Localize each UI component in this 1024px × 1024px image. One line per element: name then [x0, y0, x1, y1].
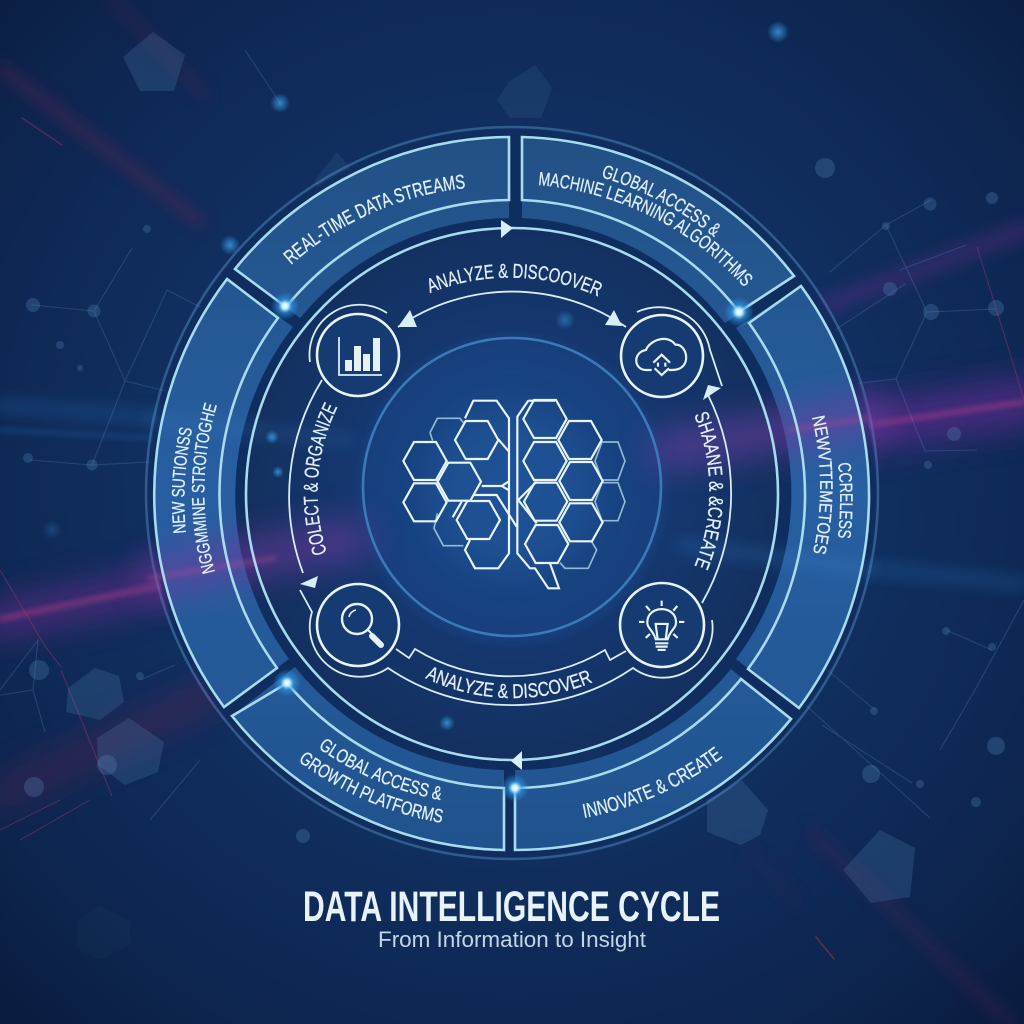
- inner label: bottom: ANALYZE & DISCOVER: [424, 667, 592, 698]
- subtitle: From Information to Insight: [378, 927, 646, 952]
- segment frames: [154, 137, 869, 850]
- inner label: right: SHAANE & &CREATE: [694, 412, 724, 570]
- inner disc: [246, 227, 778, 759]
- segment fills: [154, 137, 869, 850]
- segment label: global access and machine learning: GLOBAL ACCESS &: [603, 166, 720, 238]
- segment label: innovate and create: INNOVATE & CREATE: [582, 746, 723, 818]
- icon: cloud upload: [621, 315, 703, 397]
- segment label: global access and machine learning: MACHINE LEARNING ALGORITHMS: [539, 172, 752, 286]
- outer thin ring: [146, 127, 878, 859]
- ring arrow: bottom: [511, 751, 522, 770]
- segment label: global access and growth platforms: GROWTH PLATFORMS: [300, 752, 443, 822]
- sparkle dots inside the ring: [265, 310, 575, 731]
- icon: light bulb: [620, 583, 704, 667]
- segment label: global access and growth platforms: GLOBAL ACCESS &: [320, 739, 441, 800]
- brain hexagon network: [403, 400, 625, 588]
- ring arrow: top: [501, 220, 513, 238]
- icon: bar chart: [317, 314, 399, 396]
- bright hexagons and spine: [403, 400, 603, 588]
- segment label: right: CCRELESS: [838, 462, 853, 538]
- arrowheads on the inner cycle: [300, 310, 721, 588]
- title: DATA INTELLIGENCE CYCLE: [303, 883, 720, 931]
- segment label: real-time data streams: REAL-TIME DATA STREAMS: [282, 174, 465, 264]
- segment label: left: [172, 402, 217, 574]
- icon: magnifying glass: [317, 584, 399, 666]
- segment label: right: NEWVTTEMETOES: [812, 416, 833, 554]
- segment label: left: NEW SUTIONSS: [172, 427, 192, 534]
- segment label: right: [812, 416, 853, 554]
- inner label: left: COLECT & ORGANIZE: [304, 402, 338, 555]
- main ring line: [246, 228, 778, 760]
- cycle connector arcs: [289, 292, 731, 705]
- inner label: top: ANALYZE & DISCOOVER: [429, 264, 602, 297]
- dark ring base: [149, 130, 875, 856]
- colour wash over the ring: [150, 415, 870, 578]
- glowing junction points: [271, 292, 754, 802]
- segment label: left: NGGMMINE STROITOGHE: [192, 402, 217, 574]
- centre ring: [363, 338, 661, 636]
- translucent hexagons: [66, 32, 915, 960]
- faint hexagons: [430, 418, 625, 568]
